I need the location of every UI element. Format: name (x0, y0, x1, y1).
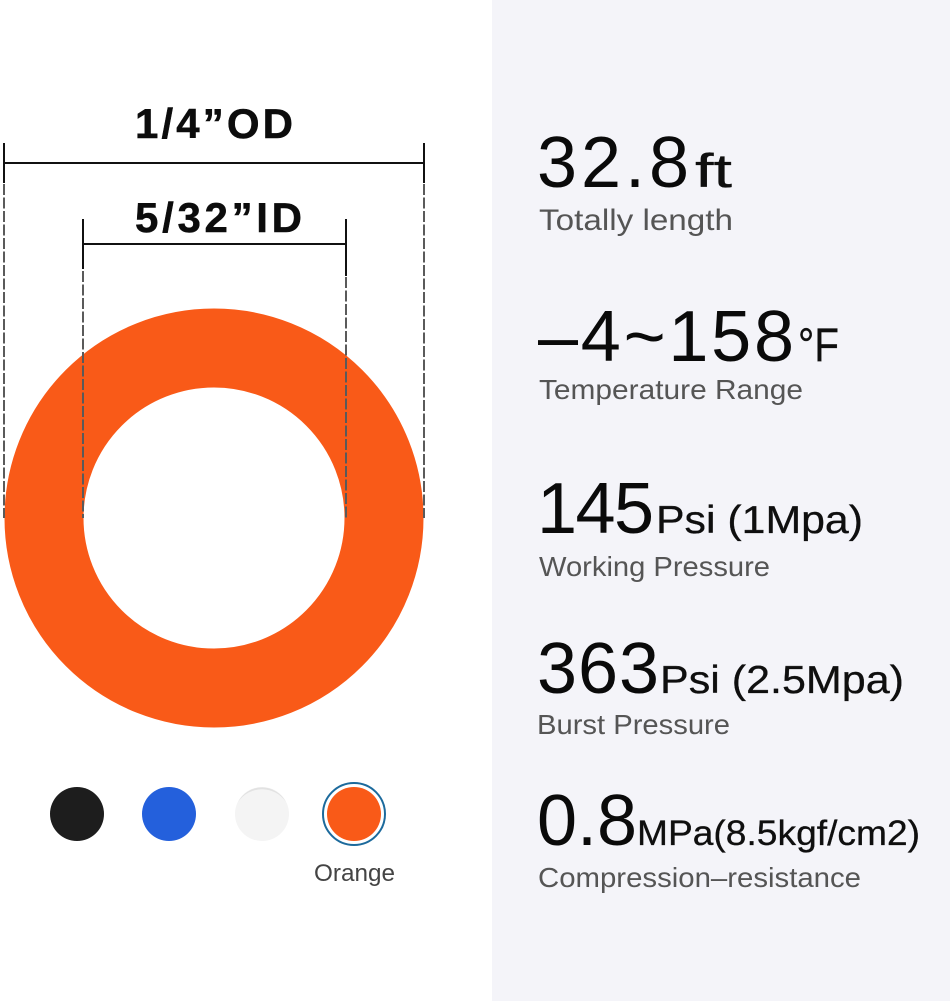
spec: length: Totally length (539, 204, 733, 237)
spec: compression resistance: Compression–resistance (538, 862, 861, 893)
spec: burst pressure (537, 629, 904, 740)
spec: compression resistance (537, 781, 920, 893)
spec: burst pressure: 363 (537, 629, 659, 709)
inner diameter dimension (83, 194, 346, 518)
colour swatches (50, 783, 395, 887)
spec: working pressure (537, 469, 863, 582)
spec: temperature: Temperature Range (539, 374, 803, 405)
heading: inner diameter: 5/32”ID (135, 194, 302, 241)
spec: working pressure: Psi (1Mpa) (656, 499, 863, 542)
heading: outer diameter: 1/4”OD (135, 100, 293, 147)
swatch: white (235, 787, 289, 841)
spec: burst pressure: Burst Pressure (537, 709, 730, 740)
swatch: orange selected (323, 783, 385, 845)
panel: specifications background (492, 0, 950, 1001)
spec: compression resistance: 0.8 (537, 781, 637, 861)
spec: temperature: °F (798, 318, 839, 371)
swatch label: Orange (314, 860, 395, 887)
spec: length: ft (695, 144, 732, 197)
spec: length (537, 123, 733, 237)
spec: burst pressure: Psi (2.5Mpa) (660, 659, 904, 702)
spec: working pressure: Working Pressure (539, 551, 770, 582)
spec: temperature: –4~158 (538, 297, 794, 377)
spec: compression resistance: MPa(8.5kgf/cm2) (637, 814, 920, 853)
spec: working pressure: 145 (537, 469, 654, 549)
outer diameter dimension (4, 100, 424, 518)
tube cross-section ring (44, 348, 384, 688)
spec: temperature (538, 297, 839, 405)
spec: length: 32.8 (537, 123, 689, 203)
swatch: blue (142, 787, 196, 841)
swatch: black (50, 787, 104, 841)
